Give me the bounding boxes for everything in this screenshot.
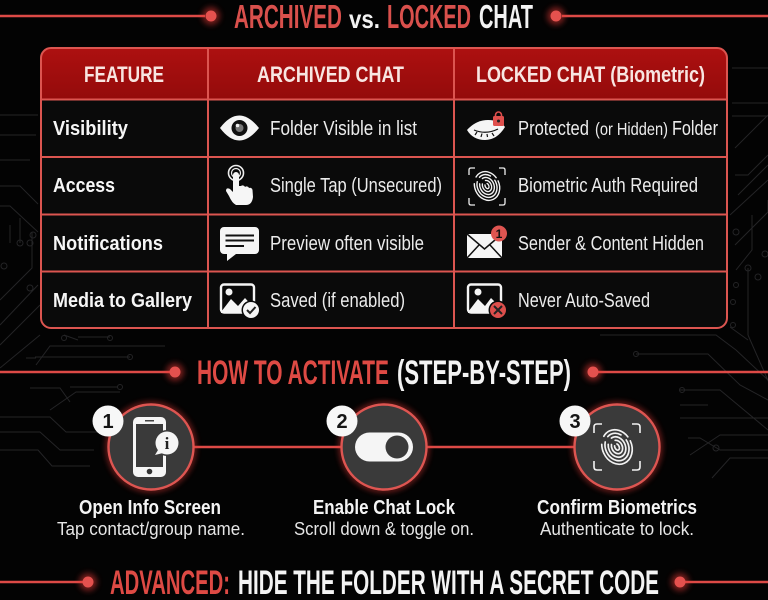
section heading: how to activate xyxy=(0,354,768,392)
text: saved if enabled: Saved (if enabled) xyxy=(270,290,405,312)
row label: notifications: Notifications xyxy=(53,232,163,255)
text: protected folder: (or Hidden) xyxy=(595,119,668,139)
step 2 description: Scroll down & toggle on. xyxy=(294,518,474,539)
icon: closed eye with lock xyxy=(467,112,505,140)
step 1 title: Open Info Screen xyxy=(79,497,221,519)
row label: access: Access xyxy=(53,174,115,197)
step 1 circle xyxy=(108,404,194,490)
text: sender hidden: Sender & Content Hidden xyxy=(518,233,704,255)
icon: toggle switch xyxy=(355,432,413,462)
icon: envelope with badge: 1 xyxy=(496,227,503,241)
text: protected folder: Folder xyxy=(672,118,718,140)
text: preview visible: Preview often visible xyxy=(270,233,424,255)
step 1 description: Tap contact/group name. xyxy=(57,518,245,539)
icon: open eye xyxy=(220,116,259,140)
text: biometric auth: Biometric Auth Required xyxy=(518,175,698,197)
icon: tap hand xyxy=(226,166,253,205)
icon: media saved xyxy=(221,284,260,320)
badge 2 xyxy=(326,406,358,436)
step 3 circle xyxy=(574,404,660,490)
step 2 title: Enable Chat Lock xyxy=(313,497,456,519)
table body xyxy=(41,48,727,328)
table header band xyxy=(41,48,727,99)
comparison table xyxy=(41,48,727,328)
icon: phone info xyxy=(133,417,180,477)
header: archived chat: ARCHIVED CHAT xyxy=(257,62,404,87)
icon: media blocked xyxy=(468,284,508,320)
text: protected folder xyxy=(518,118,718,140)
step connector lines xyxy=(194,444,574,450)
title row xyxy=(0,0,768,35)
icon: phone info: i xyxy=(165,434,170,453)
step 3 description: Authenticate to lock. xyxy=(540,518,694,539)
badge 3 xyxy=(560,406,590,436)
table grid xyxy=(41,48,727,328)
text: never saved: Never Auto-Saved xyxy=(518,290,650,312)
step 2 circle xyxy=(341,404,427,490)
text: single tap: Single Tap (Unsecured) xyxy=(270,175,442,197)
section heading: how to activate: (STEP-BY-STEP) xyxy=(397,354,571,392)
title vs: vs. xyxy=(349,4,380,34)
text: folder visible: Folder Visible in list xyxy=(270,118,417,140)
step 3 title: Confirm Biometrics xyxy=(537,497,697,519)
step 2 xyxy=(294,404,474,539)
row label: media to gallery: Media to Gallery xyxy=(53,289,193,312)
text: protected folder: Protected xyxy=(518,118,589,140)
section heading: advanced xyxy=(0,564,768,600)
header: locked chat: LOCKED CHAT (Biometric) xyxy=(476,62,705,87)
icon: chat bubble xyxy=(220,227,259,261)
icon: fingerprint xyxy=(594,424,640,470)
icon: envelope with badge xyxy=(467,226,507,258)
badge 2: 2 xyxy=(336,411,348,433)
badge 3: 3 xyxy=(569,411,581,433)
row label: visibility: Visibility xyxy=(53,117,129,140)
step 1 xyxy=(57,404,245,539)
icon: fingerprint scan xyxy=(469,167,505,205)
header: feature: FEATURE xyxy=(84,62,164,87)
badge 1: 1 xyxy=(102,411,114,433)
badge 1 xyxy=(92,406,124,436)
step 3 xyxy=(537,404,697,539)
section heading: how to activate: HOW TO ACTIVATE xyxy=(197,354,389,392)
